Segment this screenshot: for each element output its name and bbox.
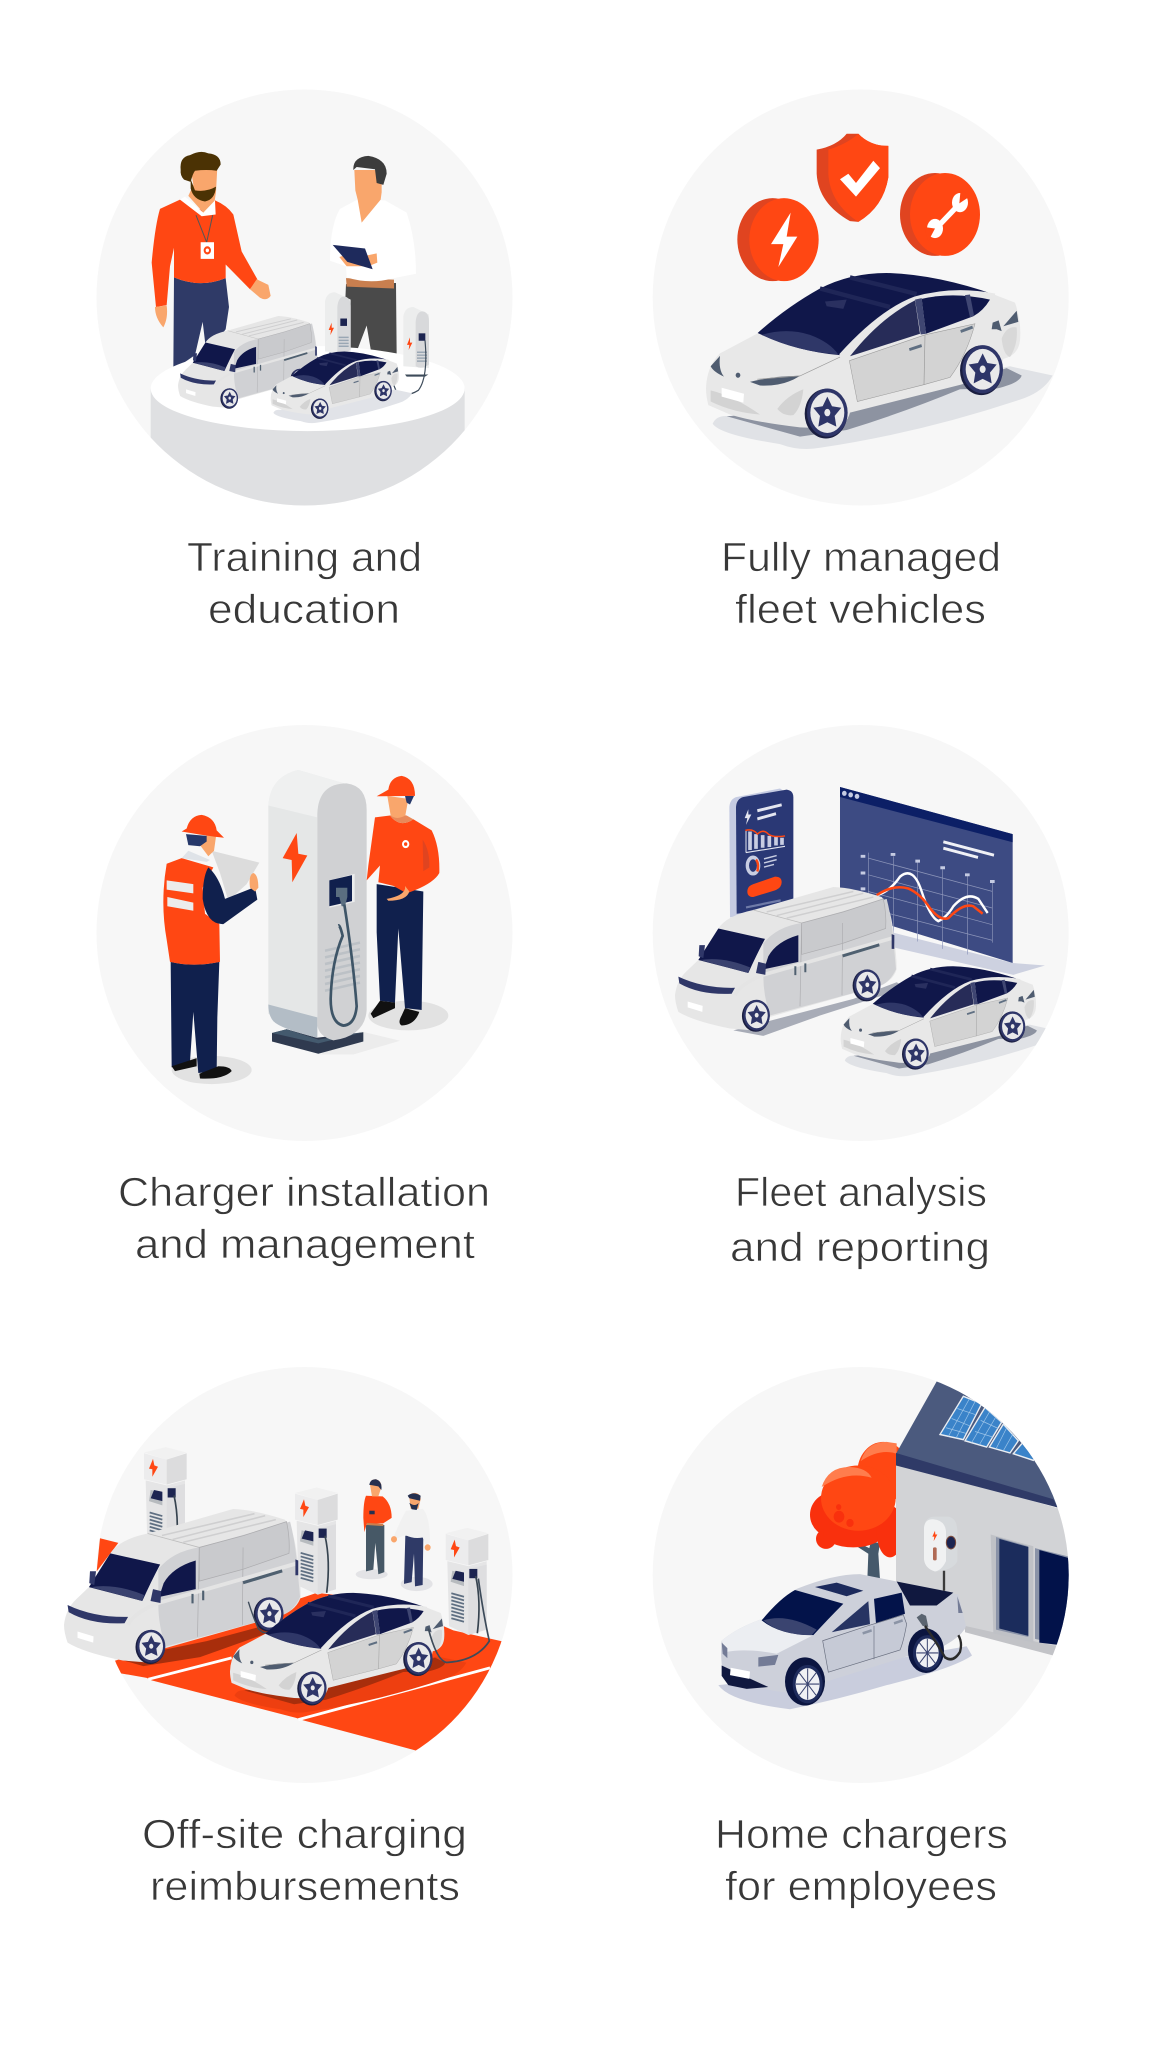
colleague in white shirt with tablet	[332, 156, 397, 354]
van model	[178, 316, 318, 409]
red parking bay	[97, 1538, 517, 1751]
illustration: parking bays with chargers	[64, 1447, 517, 1751]
car	[230, 1593, 444, 1706]
analytics screen with line chart	[840, 787, 1013, 963]
van shadow	[118, 1625, 270, 1666]
icon: wrench badge	[900, 173, 980, 256]
icon: shield with checkmark	[817, 134, 888, 222]
charging cable to van	[248, 1602, 267, 1633]
van	[64, 1509, 301, 1664]
caption	[721, 534, 1001, 632]
charging stations	[144, 1447, 488, 1635]
caption	[730, 1169, 990, 1270]
electric pickup	[721, 1574, 966, 1706]
background circle	[96, 725, 512, 1141]
background circle	[96, 1367, 512, 1783]
illustration: dashboards with van and car	[675, 787, 1056, 1076]
caption: Fully managed	[721, 534, 1001, 580]
floor shadows	[172, 1001, 448, 1084]
caption: education	[208, 586, 400, 632]
caption: Off-site charging	[142, 1811, 467, 1857]
phone with charts	[729, 789, 793, 917]
van	[675, 887, 897, 1032]
panel: home chargers for employees	[718, 1382, 1069, 1908]
caption: Training and	[187, 534, 422, 580]
caption: Charger installation	[118, 1169, 490, 1215]
screen shadow	[892, 932, 1045, 975]
charge plug and cable	[917, 1614, 961, 1659]
illustration: instructors with vehicle models on a platform	[151, 152, 465, 522]
caption: for employees	[725, 1863, 997, 1909]
car	[841, 966, 1056, 1076]
illustration: car with service badges	[706, 134, 1053, 449]
background circle	[653, 1367, 1069, 1783]
solar panels	[940, 1396, 1035, 1460]
icon: charging badge	[737, 198, 819, 281]
technician in hard hat with plans	[163, 815, 259, 1079]
charging cable to car	[428, 1579, 489, 1662]
panel: fleet analysis and reporting	[675, 787, 1046, 1270]
caption	[118, 1169, 490, 1267]
technician in cap and orange shirt	[367, 776, 439, 1026]
panel: charger installation and management	[120, 770, 487, 1266]
pickup shadow	[718, 1646, 972, 1709]
caption: reimbursements	[150, 1863, 460, 1909]
background circle	[96, 90, 512, 506]
illustration: technicians at a charger	[163, 770, 448, 1084]
caption	[715, 1811, 1008, 1909]
caption: Fleet analysis	[735, 1169, 987, 1215]
illustration: house, tree, wall charger and pickup	[718, 1372, 1093, 1709]
panel: off-site charging reimbursements	[64, 1447, 502, 1900]
panel: fully managed fleet vehicles	[706, 134, 1053, 624]
caption	[187, 534, 422, 632]
tree	[810, 1442, 900, 1578]
patio doors	[990, 1534, 1069, 1645]
caption: and management	[135, 1221, 476, 1267]
caption	[142, 1811, 467, 1909]
instructor in orange sweater	[152, 152, 271, 370]
car	[706, 273, 1020, 439]
background circle	[653, 725, 1069, 1141]
caption: and reporting	[730, 1224, 990, 1270]
car shadow	[235, 1656, 466, 1713]
charging station	[268, 770, 367, 1054]
van shadow	[733, 982, 907, 1036]
caption: Home chargers	[715, 1811, 1008, 1857]
car model	[271, 351, 412, 423]
platform	[150, 348, 464, 506]
car shadow	[713, 366, 1053, 449]
caption: fleet vehicles	[735, 586, 986, 632]
panel: training and education	[150, 152, 465, 624]
small figures: two people talking	[356, 1479, 433, 1591]
house wall and roof	[896, 1382, 1068, 1656]
charger posts	[325, 292, 429, 395]
background circle	[653, 90, 1069, 506]
wall-mounted home charger	[924, 1517, 957, 1591]
